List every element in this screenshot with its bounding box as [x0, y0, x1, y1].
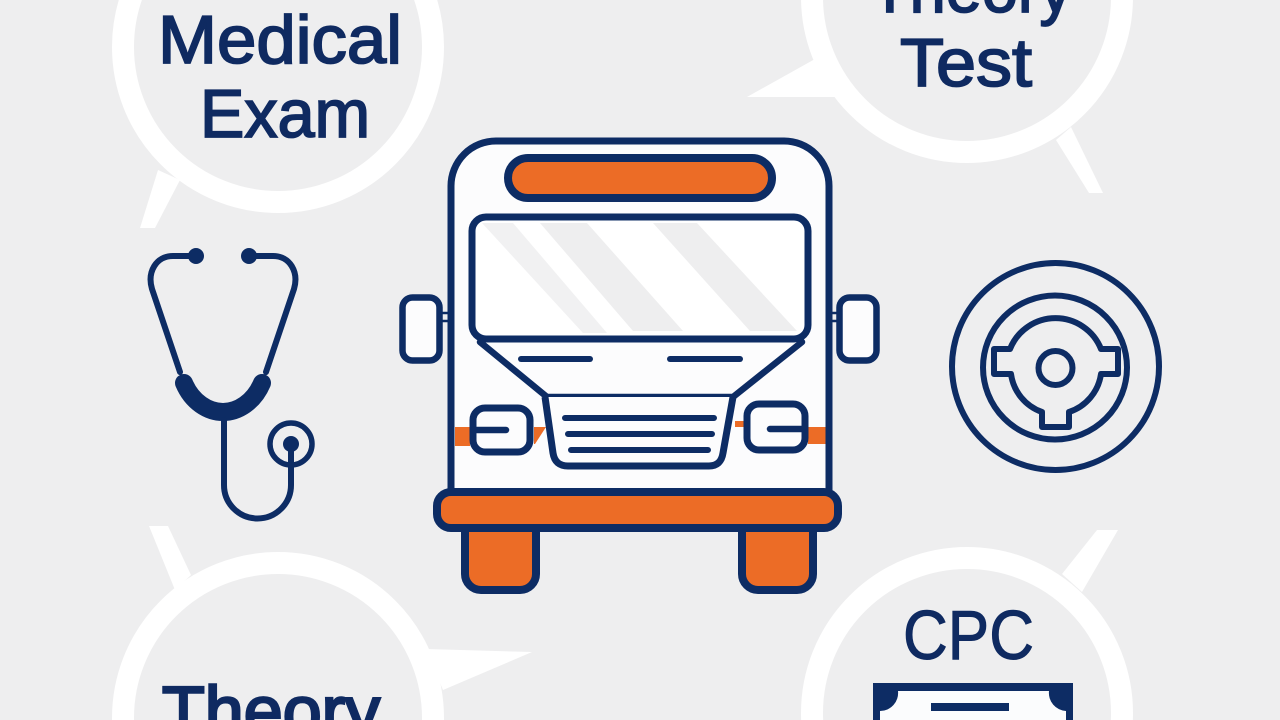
- left mirror: [402, 298, 449, 360]
- icon: left wheel: [465, 526, 536, 590]
- icon: right wheel: [742, 526, 813, 590]
- bumper: [437, 492, 838, 528]
- windshield: [472, 217, 808, 339]
- destination sign: [508, 158, 772, 198]
- right headlight: [747, 404, 805, 450]
- grille: [545, 397, 733, 466]
- icon: certificate: [873, 683, 1073, 720]
- heading: Medical Exam: Exam: [200, 76, 370, 152]
- heading: Medical Exam: [158, 2, 402, 152]
- illustration: bus front: [402, 141, 876, 590]
- panel: CPC speech bubble: [812, 530, 1122, 720]
- icon: stethoscope: [151, 248, 312, 518]
- heading: Theory Test: Test: [900, 25, 1032, 101]
- right mirror: [831, 298, 876, 360]
- bus body: [451, 141, 829, 492]
- panel: theory test speech bubble: [747, 0, 1122, 193]
- panel: lower theory speech bubble: [123, 526, 532, 720]
- heading: Theory Test: [870, 0, 1072, 101]
- dashboard panel lines: [480, 342, 802, 397]
- panel: medical exam speech bubble: [123, 0, 433, 228]
- icon: steering wheel: [952, 263, 1159, 470]
- heading: CPC: CPC: [903, 596, 1034, 674]
- orange side stripes: [455, 421, 826, 446]
- left headlight: [473, 408, 530, 452]
- heading: Medical Exam: Medical: [158, 2, 402, 78]
